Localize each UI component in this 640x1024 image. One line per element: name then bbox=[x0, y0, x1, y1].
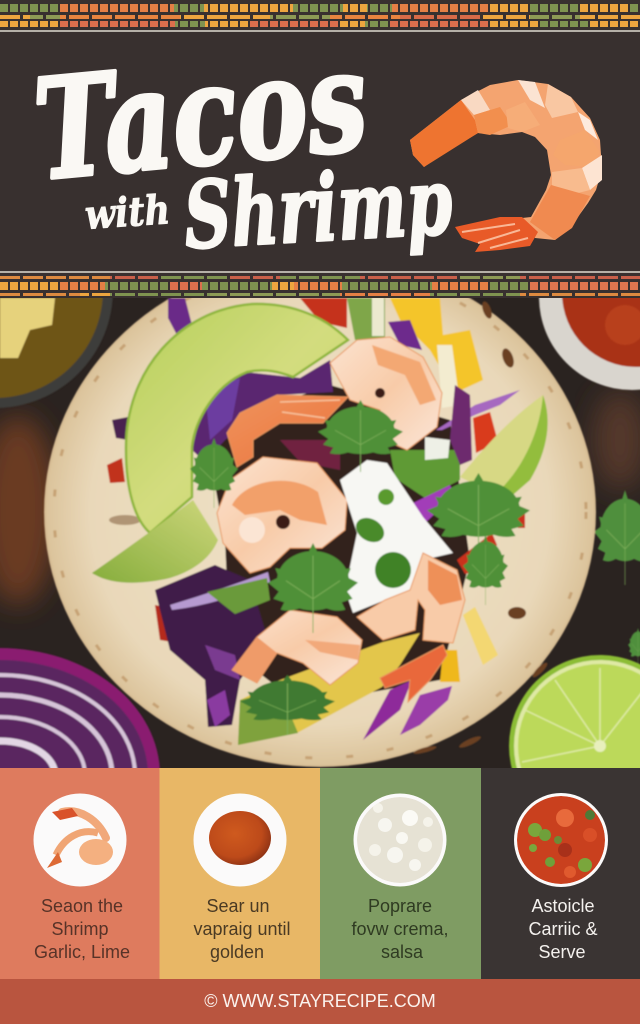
top-right salsa bowl bbox=[539, 204, 640, 390]
photo: shrimp taco bbox=[0, 298, 640, 768]
step text: vapraig until bbox=[193, 919, 291, 939]
crema with green sauce bbox=[340, 460, 453, 613]
step text: Carriic & bbox=[528, 919, 598, 939]
step text: Shrimp bbox=[51, 919, 109, 939]
title word: with: with bbox=[83, 186, 171, 239]
lime wedge bbox=[508, 654, 640, 768]
step panel: assemble bbox=[514, 793, 608, 958]
right cilantro garnish bbox=[594, 490, 640, 666]
cilantro leaves bbox=[190, 400, 530, 735]
background vegetables bbox=[107, 298, 525, 682]
red cabbage half bbox=[0, 648, 160, 902]
website credit: © WWW.STAYRECIPE.COM bbox=[204, 991, 436, 1011]
title word: Shrimp: Shrimp bbox=[181, 147, 455, 270]
icon: salsa in white bowl bbox=[514, 793, 608, 887]
tortilla bbox=[44, 257, 596, 767]
top patterned border bbox=[0, 4, 640, 32]
top-left bowl bbox=[0, 172, 113, 408]
footer bar bbox=[0, 979, 640, 1024]
shadow under the filling bbox=[205, 385, 470, 705]
step panel: prepare bbox=[320, 768, 481, 979]
title word: Tacos: Tacos bbox=[28, 18, 374, 212]
icon: crema in white bowl bbox=[354, 794, 446, 886]
icon: header shrimp bbox=[410, 80, 602, 252]
step text: Seaon the bbox=[41, 896, 123, 916]
step text: salsa bbox=[381, 942, 424, 962]
shrimp: left tail bbox=[227, 395, 348, 467]
step text: Sear un bbox=[206, 896, 270, 916]
step panel: sear bbox=[160, 768, 320, 979]
step text: Astoicle bbox=[531, 896, 595, 916]
red cabbage shreds bbox=[112, 298, 520, 740]
shrimp pieces bbox=[217, 337, 442, 685]
icon: shrimp in white circle bbox=[34, 794, 126, 886]
step text: fovw crema, bbox=[351, 919, 449, 939]
shrimp: lower right with tail bbox=[357, 553, 465, 702]
shrimp: bottom bbox=[232, 610, 362, 685]
shrimp: top right bbox=[330, 337, 442, 450]
shrimp: centre bbox=[217, 457, 347, 573]
bottom patterned border bbox=[0, 271, 640, 296]
step panel: season bbox=[0, 768, 160, 979]
step text: Garlic, Lime bbox=[34, 942, 130, 962]
header banner background bbox=[0, 0, 640, 298]
title bbox=[28, 18, 455, 270]
step text: Serve bbox=[538, 942, 586, 962]
icon: chili powder in white circle bbox=[194, 794, 286, 886]
step text: Poprare bbox=[368, 896, 432, 916]
step text: golden bbox=[210, 942, 264, 962]
avocado slices bbox=[92, 304, 548, 745]
